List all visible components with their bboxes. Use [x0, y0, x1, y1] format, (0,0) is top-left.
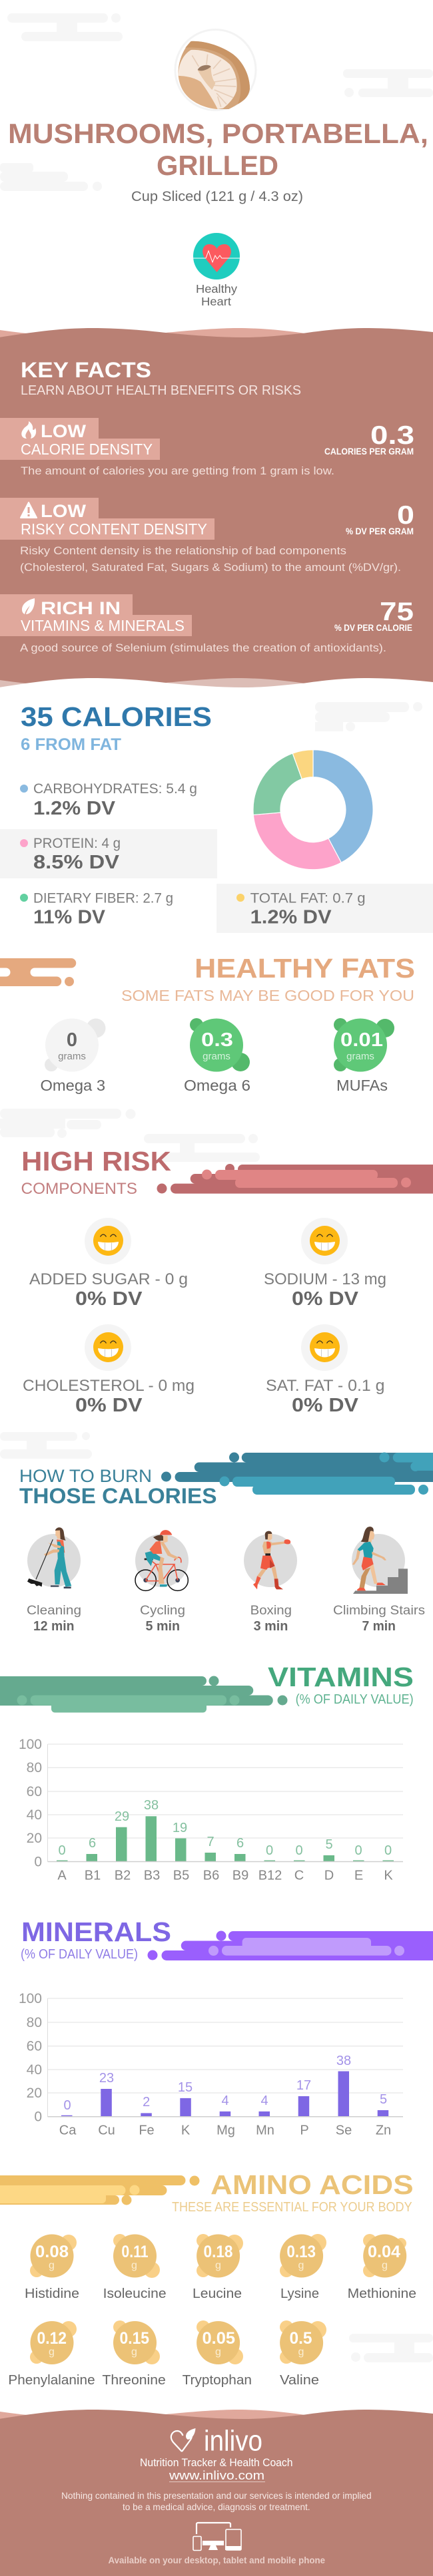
- amino: leucine: [193, 2234, 243, 2301]
- fact: vitamins and minerals: % DV PER CALORIE: [334, 623, 412, 633]
- amino: tryptophan: [183, 2320, 252, 2388]
- icon: smiley: [93, 1226, 123, 1256]
- activity labels: Boxing: [250, 1604, 292, 1618]
- bar chart: vitamins: 80: [27, 1760, 42, 1775]
- heading: VITAMINS: [268, 1662, 414, 1692]
- bar chart: minerals: K: [181, 2123, 191, 2137]
- activity labels: Cleaning: [27, 1604, 81, 1618]
- bar chart: vitamins: 6: [89, 1836, 96, 1851]
- fact: vitamins and minerals: RICH IN: [41, 598, 121, 618]
- panel: how to burn those calories: [19, 1452, 433, 1634]
- heading: HOW TO BURN: [19, 1466, 152, 1486]
- fact: calorie density: LOW: [41, 421, 87, 441]
- activity labels: Climbing Stairs: [333, 1604, 425, 1618]
- bar chart: vitamins: B1: [85, 1869, 101, 1883]
- heading: AMINO ACIDS: [211, 2169, 414, 2200]
- stat: MUFAs: 0.01: [340, 1029, 383, 1051]
- bar chart: vitamins: 7: [207, 1835, 215, 1849]
- bar chart: vitamins: B12: [258, 1869, 282, 1883]
- serving size: Cup Sliced (121 g / 4.3 oz): [131, 189, 303, 204]
- component: cholesterol: 0% DV: [75, 1395, 143, 1416]
- bar chart: minerals: 20: [27, 2086, 42, 2101]
- bar chart: vitamins: D: [324, 1869, 334, 1883]
- legend: dietary fiber: DIETARY FIBER: 2.7 g: [33, 890, 173, 906]
- panel: healthy fats: [0, 953, 415, 1094]
- activity labels: 5 min: [145, 1619, 180, 1634]
- heading: [21, 358, 301, 398]
- header decoration: [0, 2175, 200, 2205]
- heading: (% OF DAILY VALUE): [21, 1947, 138, 1962]
- amino: leucine: g: [215, 2260, 221, 2271]
- panel: calories: [0, 701, 433, 933]
- icon: smiley: [310, 1332, 340, 1362]
- bar chart: minerals: 38: [336, 2054, 351, 2068]
- bar chart: vitamins: B6: [203, 1869, 219, 1883]
- amino: tryptophan: Tryptophan: [183, 2373, 252, 2388]
- component: sodium: SODIUM - 13 mg: [264, 1270, 386, 1288]
- fact: calorie density: The amount of calories you are getting from 1 gram is low.: [21, 464, 334, 477]
- bar chart: minerals: 4: [221, 2094, 229, 2108]
- bar chart: vitamins: 0: [384, 1843, 392, 1858]
- logo: inlivo: inlivo: [204, 2425, 262, 2457]
- bar chart: vitamins: 0: [58, 1843, 66, 1858]
- bar chart: vitamins: C: [294, 1869, 304, 1883]
- bar chart: minerals: 23: [99, 2071, 114, 2086]
- amino: methionine: Methionine: [348, 2287, 416, 2301]
- badge label: Heart: [201, 295, 231, 308]
- heading: [21, 1146, 171, 1198]
- amino: phenylalanine: Phenylalanine: [8, 2373, 95, 2388]
- bar chart: vitamins: B3: [144, 1869, 160, 1883]
- heading: THOSE CALORIES: [19, 1484, 217, 1508]
- bar chart: vitamins: 100: [19, 1737, 42, 1752]
- fact: calorie density: CALORIE DENSITY: [21, 441, 153, 458]
- amino: phenylalanine: [8, 2321, 95, 2388]
- stat: MUFAs: MUFAs: [336, 1077, 388, 1094]
- component: cholesterol: CHOLESTEROL - 0 mg: [23, 1377, 195, 1395]
- bar chart: minerals: Ca: [59, 2123, 77, 2137]
- heading: KEY FACTS: [21, 358, 151, 382]
- icon: leaf: [22, 598, 35, 614]
- component: cholesterol: [23, 1324, 195, 1416]
- amino: isoleucine: [103, 2234, 167, 2301]
- component: saturated fat: SAT. FAT - 0.1 g: [266, 1377, 385, 1395]
- activity: climbing stairs: [352, 1527, 408, 1594]
- bar chart: vitamins: B5: [173, 1869, 189, 1883]
- bar chart: vitamins: 60: [27, 1784, 42, 1799]
- legend: total fat: 1.2% DV: [250, 906, 332, 928]
- bar chart: vitamins: A: [57, 1869, 67, 1883]
- icon: smiley: [310, 1226, 340, 1256]
- icon: devices: [193, 2523, 241, 2550]
- heading: [21, 1917, 171, 1962]
- legend: dietary fiber: [20, 890, 173, 928]
- heading: [172, 2169, 414, 2215]
- panel: vitamins: [0, 1662, 414, 1883]
- disclaimer: Nothing contained in this presentation and our services is intended or implied: [61, 2490, 372, 2501]
- heading: 35 CALORIES: [21, 701, 212, 732]
- heading: 6 FROM FAT: [21, 735, 121, 754]
- title: MUSHROOMS, PORTABELLA,: [8, 118, 428, 149]
- header decoration: [0, 1676, 288, 1713]
- activity labels: 12 min: [33, 1619, 75, 1634]
- bar chart: vitamins: E: [354, 1869, 363, 1883]
- icon: healthy heart: [193, 233, 240, 279]
- bar chart: minerals: Mn: [256, 2123, 274, 2137]
- bar chart: minerals: Zn: [376, 2123, 391, 2137]
- fact: vitamins and minerals: A good source of Selenium (stimulates the creation of antioxidants).: [20, 642, 386, 654]
- bar chart: minerals: P: [300, 2123, 309, 2137]
- legend: total fat: [236, 890, 366, 928]
- amino: phenylalanine: g: [49, 2346, 55, 2358]
- logo: inlivo: [171, 2425, 262, 2457]
- amino: valine: [280, 2320, 326, 2388]
- heading: HEALTHY FATS: [195, 953, 415, 984]
- legend: dietary fiber: 11% DV: [33, 906, 106, 928]
- heading: HIGH RISK: [21, 1146, 171, 1177]
- heading: (% OF DAILY VALUE): [296, 1692, 414, 1707]
- panel: key facts: [0, 328, 433, 696]
- activity labels: 3 min: [254, 1619, 288, 1634]
- bar chart: minerals: 80: [27, 2015, 42, 2030]
- amino: valine: g: [298, 2346, 304, 2358]
- amino: threonine: g: [131, 2346, 137, 2358]
- stat: omega 6: 0.3: [201, 1029, 233, 1051]
- amino: valine: Valine: [280, 2373, 319, 2388]
- fact: risky content density: % DV PER GRAM: [346, 526, 414, 536]
- bar chart: minerals: Se: [336, 2123, 352, 2137]
- amino: threonine: Threonine: [102, 2373, 166, 2388]
- component: added sugar: [29, 1218, 188, 1310]
- heading: [19, 1466, 217, 1508]
- amino: valine: 0.5: [289, 2329, 312, 2348]
- fact: risky content density: Risky Content density is the relationship of bad components: [20, 544, 346, 557]
- activity labels: Cycling: [140, 1604, 185, 1618]
- bar chart: vitamins: [19, 1737, 403, 1883]
- stat: omega 3: 0: [67, 1029, 77, 1051]
- icon: warning triangle: [21, 502, 37, 518]
- fact: calorie density: 0.3: [370, 421, 414, 450]
- amino: lysine: [280, 2234, 326, 2301]
- stat: MUFAs: [334, 1018, 394, 1094]
- bar chart: vitamins: 40: [27, 1807, 42, 1823]
- bar chart: minerals: 15: [178, 2080, 193, 2095]
- icon: smiley: [93, 1332, 123, 1362]
- amino: methionine: [348, 2234, 416, 2301]
- bar chart: minerals: [19, 1991, 403, 2137]
- bar chart: vitamins: B2: [115, 1869, 131, 1883]
- amino: lysine: g: [298, 2260, 304, 2271]
- disclaimer: to be a medical advice, diagnosis or treatment.: [123, 2501, 310, 2512]
- heading: SOME FATS MAY BE GOOD FOR YOU: [121, 987, 414, 1004]
- bar chart: vitamins: 0: [295, 1843, 303, 1858]
- component: sodium: 0% DV: [292, 1288, 359, 1310]
- activity: boxing: [244, 1531, 297, 1589]
- bar chart: minerals: 60: [27, 2039, 42, 2054]
- amino: tryptophan: g: [215, 2346, 221, 2358]
- heading: MINERALS: [21, 1917, 171, 1947]
- heading: COMPONENTS: [21, 1180, 137, 1198]
- amino: histidine: [25, 2235, 79, 2301]
- panel: amino acids: [0, 2169, 416, 2388]
- heading: [268, 1662, 414, 1707]
- bar chart: minerals: 0: [34, 2110, 42, 2125]
- heading: [21, 701, 212, 754]
- stat: omega 6: Omega 6: [184, 1077, 250, 1094]
- bar chart: vitamins: 0: [34, 1854, 42, 1870]
- stat: omega 3: grams: [58, 1051, 86, 1062]
- stat: omega 3: Omega 3: [40, 1077, 105, 1094]
- bar chart: vitamins: K: [384, 1869, 393, 1883]
- fact: risky content density: [0, 498, 414, 574]
- amino: tryptophan: 0.05: [203, 2329, 235, 2348]
- fact: calorie density: CALORIES PER GRAM: [324, 447, 414, 457]
- bar chart: minerals: 40: [27, 2062, 42, 2078]
- fact: calorie density: [0, 418, 414, 477]
- bar chart: vitamins: 29: [115, 1809, 129, 1824]
- panel: minerals: [19, 1917, 433, 2137]
- amino: isoleucine: 0.11: [121, 2243, 149, 2261]
- amino: methionine: g: [382, 2260, 388, 2271]
- bar chart: vitamins: B9: [232, 1869, 248, 1883]
- panel: footer: [0, 2410, 433, 2576]
- component: saturated fat: 0% DV: [292, 1395, 359, 1416]
- bar chart: minerals: 100: [19, 1991, 42, 2006]
- header decoration: [161, 1452, 433, 1495]
- amino: methionine: 0.04: [368, 2243, 400, 2261]
- legend: protein: [20, 836, 121, 873]
- header decoration: [148, 1931, 433, 1960]
- bar chart: vitamins: 5: [325, 1837, 333, 1852]
- amino: threonine: [102, 2320, 166, 2388]
- badge label: Healthy: [196, 282, 237, 295]
- bar chart: minerals: 5: [380, 2092, 387, 2107]
- bar chart: vitamins: 6: [236, 1836, 244, 1851]
- legend: carbohydrates: 1.2% DV: [33, 798, 116, 819]
- website link: www.inlivo.com: [169, 2469, 264, 2482]
- bar chart: minerals: 4: [260, 2094, 268, 2108]
- amino: leucine: Leucine: [193, 2287, 242, 2301]
- component: added sugar: ADDED SUGAR - 0 g: [29, 1270, 188, 1288]
- amino: lysine: 0.13: [286, 2243, 316, 2261]
- bar chart: minerals: Mg: [217, 2123, 235, 2137]
- activity labels: [27, 1604, 425, 1634]
- amino: isoleucine: Isoleucine: [103, 2287, 167, 2301]
- component: sodium: [264, 1218, 386, 1310]
- availability note: Available on your desktop, tablet and mobile phone: [108, 2555, 325, 2565]
- stat: omega 6: [184, 1018, 250, 1094]
- fact: vitamins and minerals: VITAMINS & MINERALS: [21, 617, 185, 634]
- legend: total fat: TOTAL FAT: 0.7 g: [250, 890, 366, 906]
- amino: phenylalanine: 0.12: [37, 2329, 67, 2348]
- activity: cleaning: [27, 1527, 81, 1588]
- activity: cycling: [135, 1530, 189, 1590]
- fact: risky content density: LOW: [41, 501, 87, 521]
- disclaimer: [61, 2490, 372, 2512]
- amino: histidine: g: [49, 2260, 55, 2271]
- fact: vitamins and minerals: 75: [380, 598, 414, 626]
- title: GRILLED: [157, 150, 278, 181]
- bar chart: vitamins: 19: [173, 1821, 187, 1835]
- icon: mushroom photo: [175, 29, 256, 110]
- amino: isoleucine: g: [131, 2260, 137, 2271]
- component: saturated fat: [266, 1324, 385, 1416]
- component: added sugar: 0% DV: [75, 1288, 143, 1310]
- badge label: [196, 282, 237, 308]
- activity labels: 7 min: [362, 1619, 396, 1634]
- stat: omega 3: [40, 1018, 105, 1094]
- bar chart: vitamins: 20: [27, 1831, 42, 1846]
- legend: protein: 8.5% DV: [33, 852, 120, 873]
- title: [8, 118, 428, 181]
- legend: carbohydrates: [20, 781, 197, 819]
- donut chart: [253, 750, 373, 870]
- stat: MUFAs: grams: [346, 1051, 374, 1062]
- bar chart: minerals: Cu: [98, 2123, 115, 2137]
- fact: risky content density: RISKY CONTENT DENSITY: [21, 520, 207, 538]
- header decoration: [157, 1164, 433, 1194]
- bar chart: vitamins: 0: [354, 1843, 362, 1858]
- stat: omega 6: grams: [203, 1051, 230, 1062]
- bar chart: minerals: Fe: [139, 2123, 155, 2137]
- legend: carbohydrates: CARBOHYDRATES: 5.4 g: [33, 781, 197, 797]
- fact: risky content density: 0: [397, 501, 414, 530]
- bar chart: minerals: 17: [296, 2078, 311, 2093]
- bar chart: minerals: 0: [63, 2098, 71, 2113]
- tagline: Nutrition Tracker & Health Coach: [140, 2456, 293, 2469]
- fact: risky content density: (Cholesterol, Saturated Fat, Sugars & Sodium) to the amount (%DV/gr).: [20, 561, 401, 574]
- fact: vitamins and minerals: [0, 594, 414, 654]
- bar chart: vitamins: 38: [144, 1798, 159, 1813]
- bar chart: vitamins: 0: [266, 1843, 273, 1858]
- panel: high risk components: [21, 1146, 433, 1416]
- legend: protein: PROTEIN: 4 g: [33, 836, 121, 851]
- heading: [121, 953, 415, 1004]
- header: food photo, title and badge: [8, 29, 428, 308]
- heading: LEARN ABOUT HEALTH BENEFITS OR RISKS: [21, 383, 301, 398]
- amino: histidine: 0.08: [35, 2243, 69, 2261]
- amino: threonine: 0.15: [120, 2329, 149, 2348]
- heading: THESE ARE ESSENTIAL FOR YOUR BODY: [172, 2200, 412, 2215]
- bar chart: minerals: 2: [143, 2095, 150, 2110]
- amino: histidine: Histidine: [25, 2287, 79, 2301]
- amino: lysine: Lysine: [280, 2287, 319, 2301]
- icon: flame: [21, 421, 36, 439]
- amino: leucine: 0.18: [204, 2243, 233, 2261]
